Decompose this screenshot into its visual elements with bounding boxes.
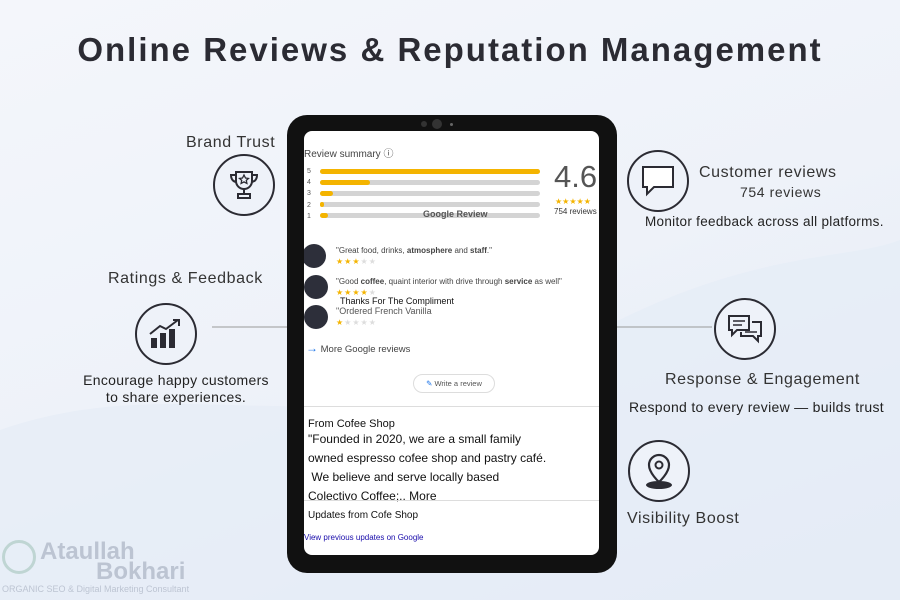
review list: ★★★★★ <box>336 257 377 266</box>
watermark logo: ORGANIC SEO & Digital Marketing Consultant <box>2 584 189 594</box>
screen: We believe and serve locally based <box>311 470 499 484</box>
title: Online Reviews & Reputation Management <box>77 31 823 68</box>
review summary: 4 <box>307 179 311 186</box>
review summary: 3 <box>307 190 311 197</box>
watermark logo <box>2 538 189 594</box>
heading: customer reviews: Customer reviews <box>699 164 837 181</box>
review summary: 5 <box>307 168 311 175</box>
item: response & engagement <box>629 298 884 415</box>
review list: ★★★★★ <box>336 288 377 297</box>
review summary: ★★★★★ <box>555 197 591 206</box>
review summary: 754 reviews <box>554 207 597 216</box>
text: Respond to every review — builds trust <box>629 399 884 415</box>
review list: ★★★★★ <box>336 318 377 327</box>
review summary: 2 <box>307 202 311 209</box>
review summary <box>304 148 597 220</box>
watermark logo: Ataullah <box>40 538 135 565</box>
screen <box>304 131 599 555</box>
icon: growth chart <box>135 303 197 365</box>
rating 4.6: 4.6 <box>554 159 597 194</box>
review list: "Ordered French Vanilla <box>336 306 432 316</box>
item: brand trust <box>186 134 275 216</box>
review list: Thanks For The Compliment <box>340 296 454 306</box>
write a review button: ✎ Write a review <box>426 379 482 388</box>
text: encourage: Encourage happy customers to share experiences. <box>83 372 269 405</box>
heading: Brand Trust: Brand Trust <box>186 134 275 151</box>
screen: Updates from Cofe Shop <box>308 510 418 521</box>
screen: Colectivo Coffee;.. More <box>308 489 437 503</box>
watermark logo: Bokhari <box>96 558 185 585</box>
icon: chat bubbles <box>714 298 776 360</box>
camera <box>421 121 427 127</box>
screen: owned espresso cofee shop and pastry café. <box>308 451 546 465</box>
more reviews link: → More Google reviews <box>306 341 410 355</box>
write a review button <box>413 374 495 393</box>
review list <box>304 244 562 329</box>
review list: "Good coffee, quaint interior with drive through service as well" <box>336 277 562 286</box>
icon: trophy <box>213 154 275 216</box>
item: ratings & feedback <box>83 270 269 405</box>
icon: location pin <box>628 440 690 502</box>
review summary: Google Review <box>423 209 488 219</box>
tablet <box>287 115 617 573</box>
business description: From Cofee Shop <box>308 418 395 430</box>
heading: Ratings & Feedback: Ratings & Feedback <box>108 270 263 287</box>
item: customer reviews: 754 reviews <box>740 184 821 200</box>
heading: Visibility Boost <box>627 510 739 527</box>
review list: "Great food, drinks, atmosphere and staff." <box>336 246 492 255</box>
review summary: Review summary ⓘ <box>304 149 393 160</box>
heading: Response & Engagement <box>665 371 860 388</box>
screen: View previous updates on Google <box>304 533 424 542</box>
text: monitor: Monitor feedback across all platforms. <box>645 214 884 229</box>
item: visibility boost <box>627 440 739 527</box>
review summary: 1 <box>307 213 311 220</box>
screen: "Founded in 2020, we are a small family <box>308 432 521 446</box>
icon: speech bubble <box>627 150 689 212</box>
item: customer reviews <box>627 150 884 229</box>
